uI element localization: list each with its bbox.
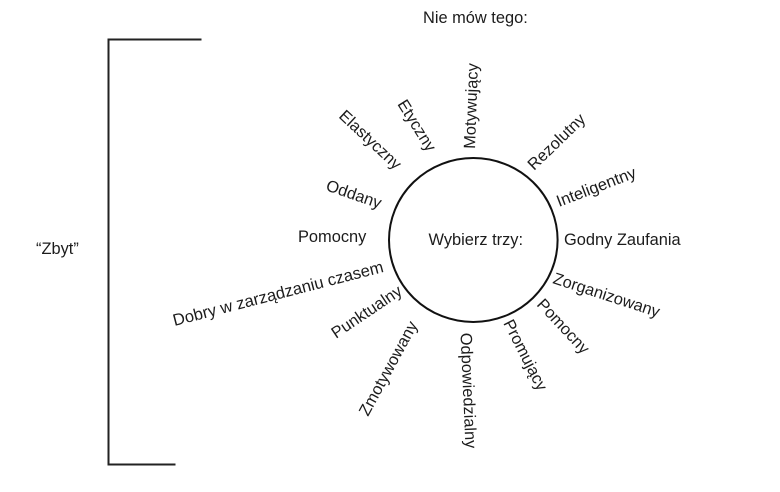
word: Inteligentny: Inteligentny <box>554 164 639 211</box>
word: Promujący: Promujący <box>499 317 551 395</box>
bracket <box>108 40 202 464</box>
center text: Wybierz trzy: <box>428 231 523 249</box>
word: Rezolutny: Rezolutny <box>524 110 590 174</box>
word: Dobry w zarządzaniu czasem: Dobry w zarządzaniu czasem <box>171 257 385 330</box>
heading: Nie mów tego: Nie mów tego: <box>423 9 528 27</box>
word: Zmotywowany: Zmotywowany <box>356 318 422 419</box>
word: Godny Zaufania: Godny Zaufania <box>564 231 682 249</box>
circle <box>389 158 558 322</box>
word: Odpowiedzialny: Odpowiedzialny <box>457 332 480 450</box>
word: Elastyczny: Elastyczny <box>335 107 405 174</box>
word: Pomocny left: Pomocny <box>298 228 367 246</box>
word: Oddany: Oddany <box>324 177 385 213</box>
word: Zorganizowany: Zorganizowany <box>551 270 663 321</box>
word: Punktualny: Punktualny <box>328 282 406 342</box>
word: Motywujący: Motywujący <box>461 62 482 149</box>
word: Etyczny: Etyczny <box>394 97 440 155</box>
label: Zbyt: “Zbyt” <box>36 240 79 258</box>
word: Pomocny right: Pomocny <box>533 295 593 358</box>
